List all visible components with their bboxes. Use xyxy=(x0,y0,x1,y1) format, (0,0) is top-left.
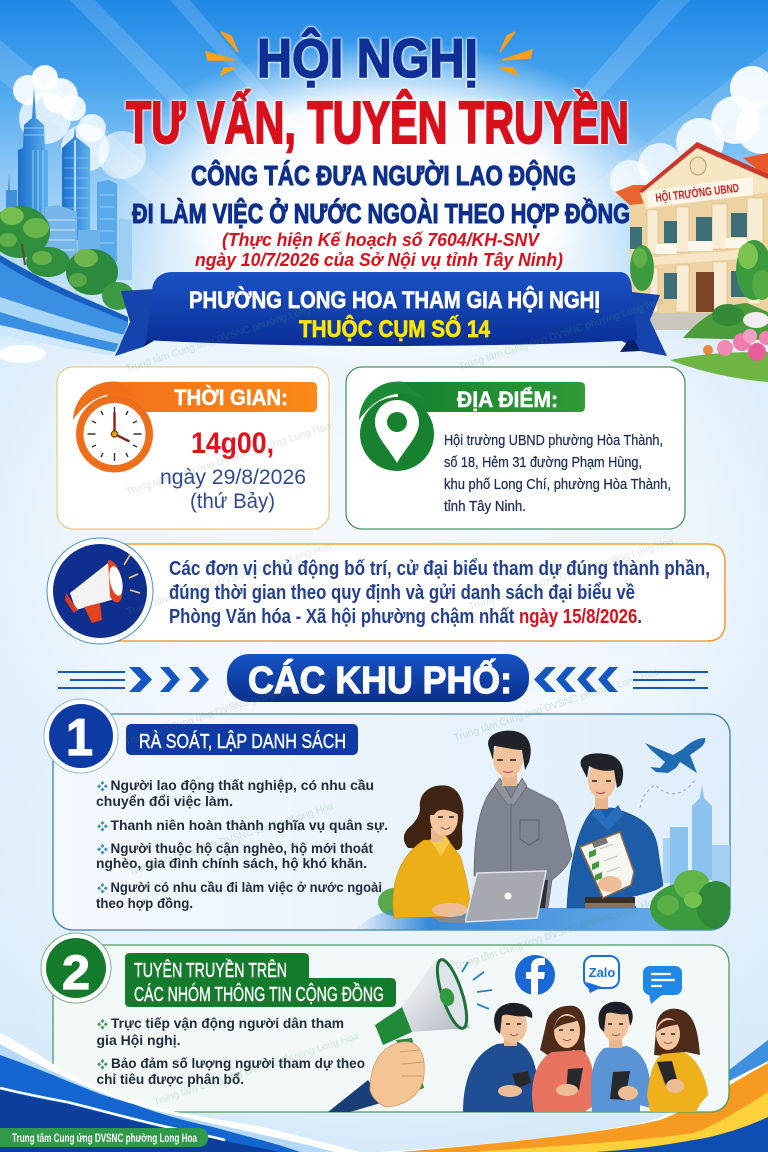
icon: location pin xyxy=(359,381,434,471)
number badge 1: 1 xyxy=(66,709,93,767)
section header 2: TUYÊN TRUYỀN TRÊN xyxy=(134,959,287,982)
plan reference: (Thực hiện Kế hoạch số 7604/KH-SNV xyxy=(222,230,541,250)
bullet list 1: Thanh niên hoàn thành nghĩa vụ quân sự. xyxy=(110,817,388,833)
bullet list 2 xyxy=(96,1015,365,1087)
ribbon banner xyxy=(115,272,667,356)
icon: clock xyxy=(73,381,153,472)
section header 1: RÀ SOÁT, LẬP DANH SÁCH xyxy=(139,730,346,753)
person: man in blue with clipboard xyxy=(567,753,663,908)
notice text: đúng thời gian theo quy định và gửi danh sách đại biểu về xyxy=(169,581,635,604)
sparkle right xyxy=(500,32,532,75)
address: khu phố Long Chí, phường Hòa Thành, xyxy=(444,477,671,493)
bullet list 2: Bảo đảm số lượng người tham dự theo xyxy=(111,1055,365,1071)
person: light blue shirt xyxy=(591,1002,650,1112)
footer tag: Trung tâm Cung ứng DVSNC phường Long Hoa xyxy=(12,1133,197,1145)
title xyxy=(126,27,630,270)
watermarks: Trung tâm Cung ứng DVSNC phường Long Hoa xyxy=(453,896,661,973)
bullet list 1: ❖ xyxy=(97,820,108,833)
watermarks: Trung tâm Cung ứng DVSNC phường Long Hoa xyxy=(126,541,334,618)
person: salmon shirt xyxy=(532,1006,596,1112)
icon: zalo: Zalo xyxy=(589,965,615,980)
bullet list 1: Người lao động thất nghiệp, có nhu cầu xyxy=(110,777,374,793)
venue header: ĐỊA ĐIỂM: xyxy=(457,387,558,412)
bullet list 1: ❖ xyxy=(97,780,108,793)
bottom waves right xyxy=(380,1040,768,1152)
notice text xyxy=(169,557,710,628)
footer tag xyxy=(0,1128,208,1147)
watermarks: Trung tâm Cung ứng DVSNC phường Long Hoa xyxy=(153,1031,361,1108)
watermarks: Trung tâm Cung ứng DVSNC phường Long Hoa xyxy=(125,421,333,498)
bullet list 2: chỉ tiêu được phân bổ. xyxy=(96,1071,244,1087)
panel 2: community groups xyxy=(41,933,729,1112)
watermarks: Trung tâm Cung ứng DVSNC phường Long Hoa xyxy=(128,801,336,878)
panel 1: review and list xyxy=(44,699,736,934)
icon: chat bubble xyxy=(643,966,682,1004)
pill heading: CÁC KHU PHỐ: xyxy=(248,657,512,702)
panel: time xyxy=(57,367,329,529)
bullet list 1: Người thuộc hộ cận nghèo, hộ mới thoát xyxy=(110,840,373,856)
trees xyxy=(378,888,394,916)
number badge 2 xyxy=(41,933,111,1003)
address: Hội trường UBND phường Hòa Thành, xyxy=(444,433,663,449)
icon: zalo xyxy=(584,956,619,993)
date: ngày 29/8/2026 xyxy=(160,466,306,489)
bullet list 1: theo hợp đồng. xyxy=(96,895,193,911)
venue header xyxy=(398,382,585,412)
person: navy shirt xyxy=(463,1003,540,1112)
icon: facebook xyxy=(515,955,555,995)
bullet list 2: ❖ xyxy=(97,1058,108,1071)
clouds right xyxy=(610,66,768,200)
banner line 2: THUỘC CỤM SỐ 14 xyxy=(299,315,491,343)
number badge 2: 2 xyxy=(62,947,90,1000)
bullet list 2: ❖ xyxy=(97,1018,108,1031)
bullet list 2: Trực tiếp vận động người dân tham xyxy=(111,1015,344,1031)
time value: 14g00, xyxy=(191,427,274,460)
watermarks: Trung tâm Cung ứng DVSNC phường Long Hoa xyxy=(453,667,661,744)
person: yellow shirt xyxy=(647,1009,708,1112)
watermarks: Trung tâm Cung ứng DVSNC phường Long Hoa xyxy=(124,671,332,748)
time header: THỜI GIAN: xyxy=(174,385,288,410)
clouds left xyxy=(0,65,146,363)
icon: green megaphone with hand xyxy=(328,957,492,1112)
bullet list 1 xyxy=(96,777,388,911)
number badge 1 xyxy=(44,699,118,773)
heading: neighbourhoods xyxy=(58,654,708,702)
watermarks: Trung tâm Cung ứng DVSNC phường Long Hoa xyxy=(458,296,666,373)
section header 1 xyxy=(126,724,358,755)
plan date: ngày 10/7/2026 của Sở Nội vụ tỉnh Tây Ninh) xyxy=(195,250,563,270)
section header 2 xyxy=(125,953,396,1007)
clipboard xyxy=(580,832,634,898)
address: tỉnh Tây Ninh. xyxy=(444,499,526,515)
title line 4: ĐI LÀM VIỆC Ở NƯỚC NGOÀI THEO HỢP ĐỒNG xyxy=(132,197,630,229)
tree right xyxy=(650,870,730,930)
skyscrapers left xyxy=(6,87,132,280)
arrows left xyxy=(58,667,209,692)
bullet list 2: gia Hội nghị. xyxy=(96,1032,180,1048)
icon: plane xyxy=(640,738,705,808)
people group xyxy=(463,1002,708,1112)
panel: notice xyxy=(47,538,725,644)
blue swoosh left xyxy=(0,255,128,356)
notice text: Phòng Văn hóa - Xã hội phường chậm nhất ngày 15/8/2026. xyxy=(169,605,642,628)
laptop xyxy=(433,871,546,923)
panel: venue xyxy=(346,367,685,529)
address: số 18, Hẻm 31 đường Phạm Hùng, xyxy=(444,455,642,471)
banner line 1: PHƯỜNG LONG HOA THAM GIA HỘI NGHỊ xyxy=(189,286,600,314)
bullet list 1: ❖ xyxy=(97,843,108,856)
time header xyxy=(108,382,317,412)
title line 1: HỘI NGHỊ xyxy=(257,27,478,89)
hall building xyxy=(615,142,768,330)
sparkle left xyxy=(206,32,238,75)
bullet list 1: ❖ xyxy=(97,882,108,895)
city backdrop xyxy=(663,785,730,890)
bullet list 1: nghèo, gia đình chính sách, hộ khó khăn. xyxy=(96,855,367,871)
trees and flowers right xyxy=(630,240,768,382)
title line 3: CÔNG TÁC ĐƯA NGƯỜI LAO ĐỘNG xyxy=(191,159,576,191)
watermarks: Trung tâm Cung ứng DVSNC phường Long Hoa xyxy=(468,536,676,613)
person: man in grey xyxy=(474,731,572,908)
person: woman in yellow xyxy=(393,785,470,918)
trees left xyxy=(0,206,134,310)
bullet list 1: chuyển đổi việc làm. xyxy=(96,793,233,809)
table xyxy=(355,908,720,930)
arrows right xyxy=(534,667,708,692)
section header 2: CÁC NHÓM THÔNG TIN CỘNG ĐỒNG xyxy=(134,982,384,1006)
bullet list 1: Người có nhu cầu đi làm việc ở nước ngoài xyxy=(110,879,382,895)
address xyxy=(444,433,671,515)
weekday: (thứ Bảy) xyxy=(190,490,275,513)
watermarks xyxy=(124,296,676,1108)
icon: megaphone badge xyxy=(47,538,153,644)
watermarks: Trung tâm Cung ứng DVSNC phường Long Hoa xyxy=(125,298,333,375)
bottom waves left xyxy=(0,1033,360,1152)
